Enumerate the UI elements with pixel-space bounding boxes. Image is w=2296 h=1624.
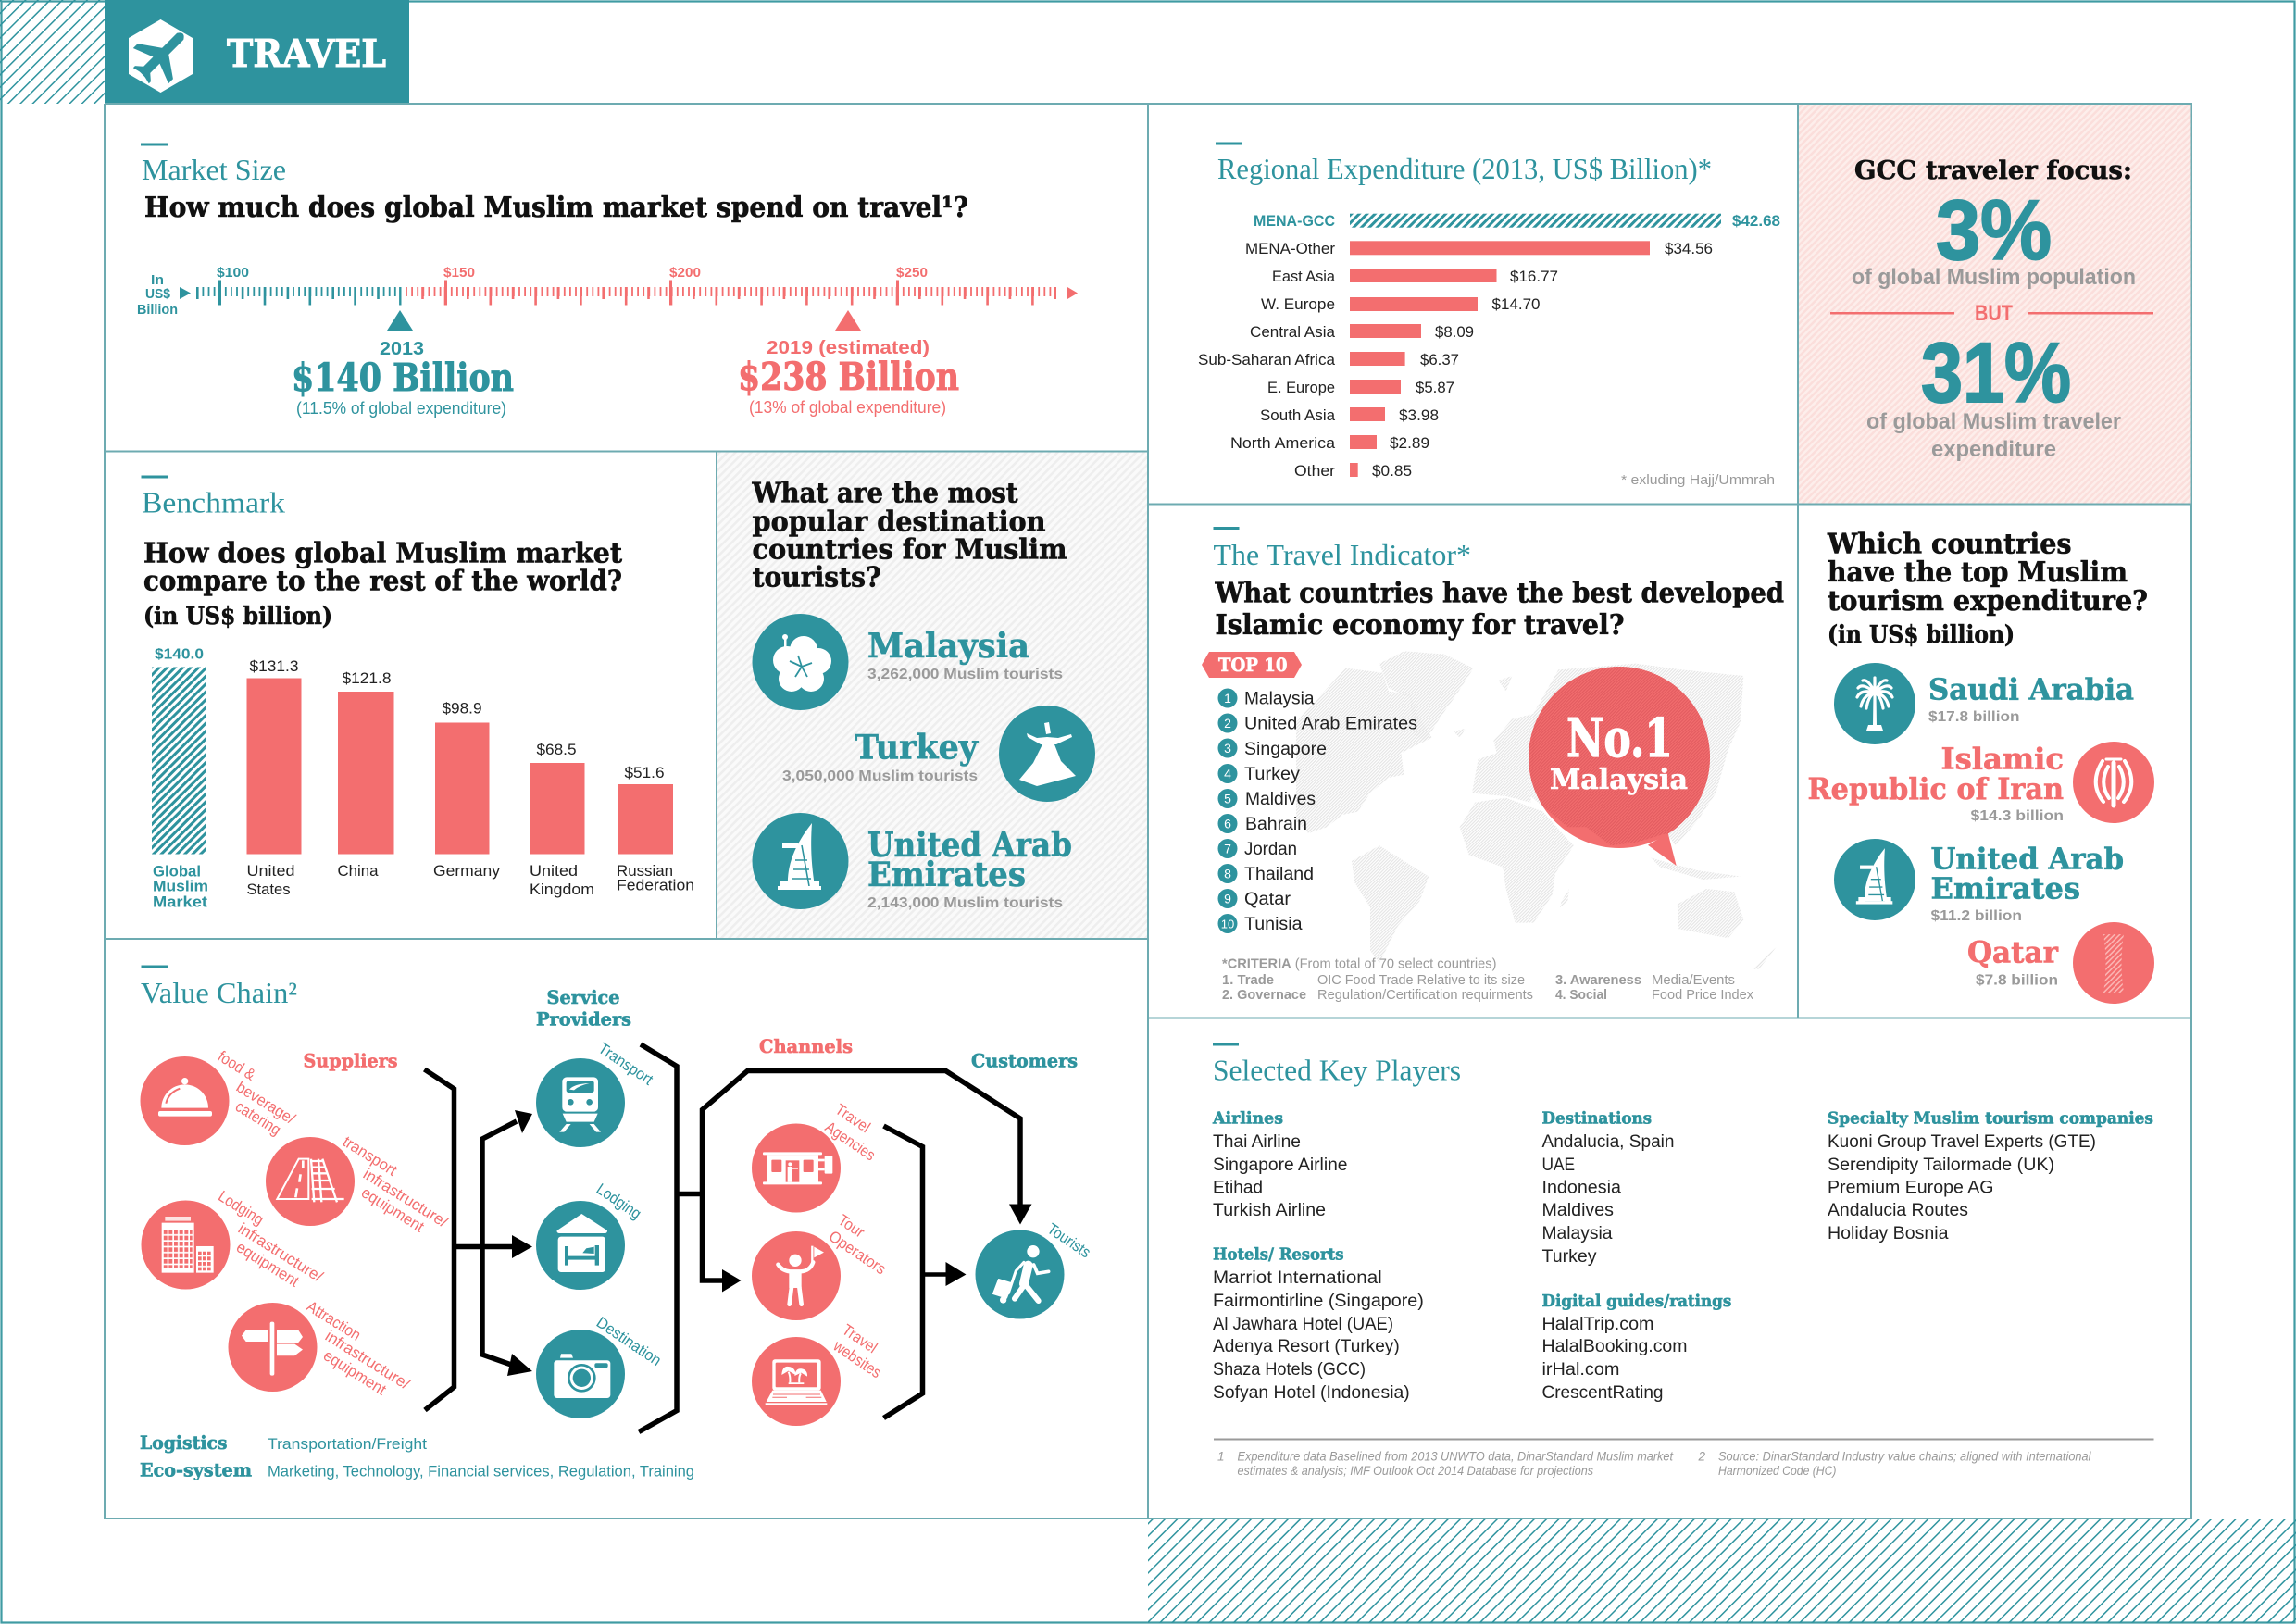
list: top 10 countries: United Arab Emirates [1244,715,1417,733]
list: top 10 countries: Thailand [1244,865,1314,884]
channel and customer labels: websites [830,1337,884,1381]
criteria notes: 2. Governace [1222,987,1306,1003]
title: TRAVEL [227,31,386,76]
icon: cloche [141,1056,230,1145]
country: Iran: Islamic [1940,741,2064,776]
country: Saudi Arabia: Saudi Arabia [1928,672,2134,707]
criteria notes: Media/Events [1652,972,1735,988]
legend: logistics and eco-system: Marketing, Technology, Financial services, Regulation, Training [268,1463,694,1480]
column headings: Suppliers [304,1050,398,1072]
badge: top 10: TOP 10 [1218,654,1287,676]
channel and customer labels: Travel [832,1101,873,1136]
list: hotels and resorts: Shaza Hotels (GCC) [1213,1360,1366,1380]
legend: logistics and eco-system: Transportation/Freight [268,1435,427,1453]
list: digital guides: Digital guides/ratings [1542,1292,1731,1311]
icon: whirling dervish [999,706,1095,802]
list: top 10 countries [1218,689,1417,934]
country: UAE [1931,841,2124,924]
marker: 2019 estimated: $238 Billion [738,355,959,399]
legend: logistics and eco-system [140,1431,694,1481]
bar chart: benchmark: $98.9 [443,700,481,717]
country: Iran: Republic of Iran [1807,771,2064,806]
icon: Qatar lattice [2073,922,2154,1004]
question: destinations: countries for Muslim [752,533,1067,567]
stat: 3 percent: 3% [1936,183,2052,278]
destination: United Arab Emirates: 2,143,000 Muslim tourists [867,895,1063,911]
bar chart: benchmark: $51.6 [624,764,665,781]
bar chart: regional: South Asia [1260,407,1336,424]
list: hotels and resorts: Sofyan Hotel (Indonesia) [1213,1383,1410,1403]
icon: palm tree [1834,663,1915,744]
list: digital guides: CrescentRating [1542,1383,1663,1403]
heading: benchmark: Benchmark [142,485,285,518]
list: top 10 countries: 5 [1224,791,1231,806]
heading: market size: Market Size [142,153,286,186]
bar chart: regional: Other [1294,463,1336,480]
list: digital guides [1542,1292,1731,1403]
question: destinations: tourists? [752,561,881,594]
question: top expenditure: (in US$ billion) [1828,621,2015,649]
list: hotels and resorts: Al Jawhara Hotel (UAE) [1213,1315,1393,1334]
criteria notes: OIC Food Trade Relative to its size [1317,972,1525,988]
list: specialty companies: Serendipity Tailormade (UK) [1828,1156,2054,1175]
callout: No.1 Malaysia [1529,667,1710,866]
footnotes: 2 [1698,1450,1705,1463]
marker: 2013 [292,310,514,418]
destination: Malaysia: 3,262,000 Muslim tourists [867,667,1063,682]
list: top 10 countries: Jordan [1244,840,1297,859]
footnotes [1217,1450,2091,1478]
icon: tour guide [752,1231,841,1320]
icon: lodging [536,1201,625,1290]
bar chart: benchmark: Muslim [153,878,208,894]
marker: 2013: 2013 [380,339,424,359]
supplier labels: catering [232,1097,284,1139]
country: Qatar: $7.8 billion [1976,972,2058,989]
supplier labels: equipment [233,1238,303,1291]
destination: Malaysia: Malaysia [867,627,1029,666]
supplier labels: infrastructure/ [235,1219,326,1286]
list: hotels and resorts: Fairmontirline (Singapore) [1213,1292,1424,1311]
heading: value chain: Value Chain² [141,976,297,1009]
icon: burj al arab [752,813,848,909]
timeline scale: $250 [896,265,928,281]
supplier labels: equipment [358,1183,428,1236]
icon: signpost [228,1303,317,1392]
destination: Malaysia [867,627,1063,682]
supplier labels: beverage/ [233,1078,298,1128]
column headings [304,986,1078,1072]
bar chart: benchmark: United [246,862,294,880]
panel: GCC traveler focus [1799,105,2190,504]
bar chart: regional: $6.37 [1420,352,1459,369]
column headings: Customers [971,1050,1078,1072]
icon: hibiscus [752,614,848,710]
country: Qatar: Qatar [1967,935,2059,970]
list: destinations: Maldives [1542,1201,1614,1220]
question: top expenditure: tourism expenditure? [1828,585,2148,618]
footnotes: Harmonized Code (HC) [1718,1464,1837,1478]
channel and customer labels: Operators [826,1228,889,1278]
list: top 10 countries: Tunisia [1244,915,1303,934]
destination: United Arab Emirates [867,826,1072,911]
list: top 10 countries: 4 [1224,767,1231,781]
marker: 2013: $140 Billion [292,356,514,400]
list: airlines: Thai Airline [1213,1132,1301,1152]
bar chart: benchmark: China [337,862,379,880]
list: top 10 countries: Maldives [1245,790,1316,809]
supplier labels: infrastructure/ [322,1327,413,1393]
service provider labels [593,1040,665,1369]
list: top 10 countries: 10 [1221,917,1234,931]
question: benchmark [144,537,622,631]
icon: laptop [752,1337,841,1426]
list: top 10 countries: Singapore [1244,740,1327,759]
destination: Turkey [782,728,979,784]
icon: airplane in hexagon [123,16,201,94]
list: top 10 countries: 6 [1224,817,1231,831]
bar chart: benchmark: Federation [617,876,694,894]
list: specialty companies: Holiday Bosnia [1828,1224,1949,1243]
divider: BUT: BUT [1975,301,2013,326]
question: top expenditure: have the top Muslim [1828,556,2128,589]
bar chart: regional: W. Europe [1261,296,1335,313]
list: digital guides: HalalBooking.com [1542,1337,1687,1356]
footnotes: Expenditure data Baselined from 2013 UNWTO data, DinarStandard Muslim market [1237,1450,1674,1463]
list: digital guides: HalalTrip.com [1542,1315,1653,1334]
bar chart: regional: MENA-Other [1245,241,1336,257]
panel: travel indicator [1202,527,1784,1003]
column headings: Channels [759,1035,853,1057]
question: top expenditure [1827,528,2148,649]
list: destinations: Turkey [1542,1247,1597,1267]
icon: camera [536,1330,625,1418]
list: specialty companies: Specialty Muslim tourism companies [1828,1109,2153,1128]
channel and customer labels [822,1101,1093,1381]
icon: Iran emblem [2073,742,2154,823]
column headings: Providers [536,1007,631,1030]
bar chart: regional: Sub-Saharan Africa [1198,352,1336,369]
bar chart: benchmark: $140.0 [155,646,204,663]
panel: value chain [140,965,1093,1481]
list: top 10 countries: Malaysia [1244,689,1315,709]
world map [1296,651,1776,969]
bar chart: benchmark: $121.8 [343,669,391,687]
list: specialty companies [1828,1109,2153,1243]
list: hotels and resorts: Marriot International [1213,1268,1382,1288]
channel and customer labels: Tourists [1044,1220,1093,1261]
list: destinations: Indonesia [1542,1178,1621,1198]
question: benchmark: compare to the rest of the world? [144,565,622,598]
bar chart: benchmark: Global [153,863,201,880]
country: UAE: $11.2 billion [1931,908,2022,924]
list: top 10 countries: Qatar [1244,890,1292,909]
stat: 31 percent [1866,326,2121,462]
marker: 2019 estimated: 2019 (estimated) [767,338,930,358]
bar chart: regional: $14.70 [1492,296,1541,313]
supplier labels [215,1047,451,1399]
list: specialty companies: Kuoni Group Travel Experts (GTE) [1828,1132,2096,1152]
legend: logistics and eco-system: Logistics [140,1431,228,1454]
list: specialty companies: Andalucia Routes [1828,1201,1968,1220]
channel and customer labels: Tour [835,1211,868,1242]
column headings: Service [546,986,620,1008]
country: Iran [1807,741,2064,824]
footnotes: estimates & analysis; IMF Outlook Oct 2014 Database for projections [1237,1464,1593,1478]
header banner [105,0,409,104]
supplier labels: Lodging [215,1187,267,1229]
bar chart: regional: $2.89 [1390,435,1429,452]
timeline scale [137,265,1078,318]
country: Saudi Arabia [1928,672,2134,725]
marker: 2019 estimated [738,310,959,417]
list: digital guides: irHal.com [1542,1360,1620,1380]
stat: 3 percent [1852,183,2136,290]
list: top 10 countries: 2 [1224,716,1231,731]
criteria notes [1222,956,1753,1003]
heading: travel indicator: The Travel Indicator* [1213,538,1471,571]
panel grid lines [105,104,2191,1518]
legend: logistics and eco-system: Eco-system [140,1459,252,1481]
bar chart: regional: $3.98 [1399,407,1439,424]
criteria notes: *CRITERIA (From total of 70 select countries) [1222,956,1496,972]
criteria notes: 1. Trade [1222,972,1274,988]
list: destinations: Destinations [1542,1109,1652,1128]
list: hotels and resorts [1213,1244,1424,1403]
supplier labels: transport [340,1132,400,1180]
corner hatch: bottom right [1148,1519,2296,1623]
country: UAE: Emirates [1931,870,2080,906]
heading: regional expenditure: Regional Expenditure (2013, US$ Billion)* [1217,152,1712,185]
bar chart: regional: Central Asia [1250,324,1336,341]
footnote: hajj: * exluding Hajj/Ummrah [1621,472,1775,488]
bar chart: regional [1198,213,1780,480]
criteria notes: 3. Awareness [1555,972,1641,988]
destination: Turkey: Turkey [855,728,979,767]
criteria notes: Food Price Index [1652,987,1753,1003]
bar chart: regional: $0.85 [1372,463,1412,480]
stat: 31 percent: 31% [1921,326,2071,420]
panel: selected key players [1212,1043,2153,1478]
destination: Turkey: 3,050,000 Muslim tourists [782,768,978,784]
bar chart: benchmark [152,646,694,911]
country: UAE: United Arab [1931,841,2124,876]
bar chart: regional: $16.77 [1510,269,1558,285]
panel: market size [137,143,1078,418]
question: islamic economy: Islamic economy for travel? [1215,609,1624,642]
bar chart: benchmark: States [246,881,291,898]
bar chart: benchmark: $131.3 [250,657,298,675]
list: airlines [1212,1109,1348,1220]
supplier labels: Attraction [304,1297,364,1344]
question: destinations: What are the most [752,478,1018,509]
bar chart: benchmark: $68.5 [537,741,576,758]
supplier labels: equipment [320,1346,390,1399]
list: top 10 countries: 7 [1224,841,1231,856]
timeline scale: $100 [217,265,249,281]
bar chart: regional: $34.56 [1665,241,1713,257]
list: hotels and resorts: Adenya Resort (Turkey) [1213,1337,1400,1356]
panel: top expenditure countries [1807,528,2154,1004]
supplier labels: food & [215,1047,259,1084]
question: market spend: How much does global Muslim market spend on travel¹? [144,192,968,224]
arrows and brackets [424,1044,1031,1431]
service provider labels: Destination [593,1314,665,1369]
supplier labels: infrastructure/ [360,1165,451,1231]
list: airlines: Singapore Airline [1213,1156,1348,1175]
bar chart: regional: East Asia [1272,269,1336,285]
list: destinations: UAE [1542,1156,1575,1175]
icon: tourist with luggage [976,1230,1065,1318]
heading: key players: Selected Key Players [1213,1054,1461,1087]
destination: United Arab Emirates: United Arab [867,826,1072,865]
panel: regional expenditure [1198,143,1780,488]
question: benchmark: (in US$ billion) [144,603,332,631]
list: top 10 countries: Turkey [1244,765,1301,784]
criteria notes: 4. Social [1555,987,1607,1003]
country: Saudi Arabia: $17.8 billion [1928,709,2020,725]
icon: hotel [141,1200,230,1289]
question: destinations: popular destination [752,506,1046,539]
timeline scale: US$ [145,286,171,302]
corner hatch: top left [0,0,105,104]
list: top 10 countries: Bahrain [1245,815,1307,834]
bar chart: regional: $8.09 [1435,324,1474,341]
list: destinations [1542,1109,1674,1267]
list: hotels and resorts: Hotels/ Resorts [1213,1244,1344,1265]
icon: road and rail [266,1137,355,1226]
footnotes: 1 [1217,1450,1225,1463]
marker: 2013: (11.5% of global expenditure) [296,399,506,418]
icon: travel agency [752,1124,841,1213]
question: top expenditure: Which countries [1827,528,2072,561]
bar chart: regional: $42.68 [1732,213,1780,230]
question: islamic economy: What countries have the best developed [1215,578,1784,609]
timeline scale: $200 [669,265,701,281]
panel: benchmark [141,476,694,911]
stat: 3 percent: of global Muslim population [1852,265,2136,290]
question: destinations [752,478,1067,594]
list: specialty companies: Premium Europe AG [1828,1178,1994,1198]
icon: burj al arab small [1834,839,1915,920]
list: destinations: Malaysia [1542,1224,1613,1243]
list: airlines: Airlines [1212,1109,1283,1128]
marker: 2019 estimated: (13% of global expenditure) [749,398,946,417]
country: Qatar [1967,935,2059,989]
criteria notes: Regulation/Certification requirments [1317,987,1533,1003]
service provider labels: Lodging [593,1181,644,1223]
bar chart: regional: MENA-GCC [1254,213,1335,230]
badge: top 10 [1202,652,1302,678]
bar chart: regional: North America [1230,435,1336,452]
icon: train [536,1058,625,1147]
country: Iran: $14.3 billion [1970,808,2064,824]
destination: United Arab Emirates: Emirates [867,856,1026,894]
question: islamic economy [1215,578,1784,642]
heading: GCC focus: GCC traveler focus: [1854,156,2132,185]
bar chart: benchmark: Market [153,893,207,911]
channel and customer labels: Travel [839,1321,880,1356]
bar chart: regional: $5.87 [1416,380,1454,396]
timeline scale: Billion [137,302,178,318]
bar chart: benchmark: Russian [617,862,673,880]
question: benchmark: How does global Muslim market [144,537,622,570]
list: top 10 countries: 9 [1224,891,1231,906]
timeline scale: In [151,272,164,288]
bar chart: benchmark: Kingdom [530,881,594,898]
bar chart: benchmark: Germany [433,862,501,880]
stat: 31 percent: expenditure [1931,437,2056,462]
list: top 10 countries: 3 [1224,741,1231,756]
timeline scale: $150 [443,265,475,281]
channel and customer labels: Agencies [822,1118,879,1164]
list: top 10 countries: 8 [1224,867,1231,881]
panel: popular destinations [718,452,1147,938]
bar chart: benchmark: United [530,862,578,880]
callout: No.1 Malaysia: Malaysia [1550,764,1688,796]
callout: No.1 Malaysia: No.1 [1566,707,1673,769]
list: top 10 countries: 1 [1224,691,1231,706]
service provider labels: Transport [595,1040,656,1089]
footnotes: Source: DinarStandard Industry value chains; aligned with International [1718,1450,2091,1463]
list: destinations: Andalucia, Spain [1542,1132,1674,1152]
bar chart: regional: E. Europe [1267,380,1335,396]
list: airlines: Turkish Airline [1213,1201,1326,1220]
stat: 31 percent: of global Muslim traveler [1866,409,2121,434]
list: airlines: Etihad [1213,1178,1263,1198]
